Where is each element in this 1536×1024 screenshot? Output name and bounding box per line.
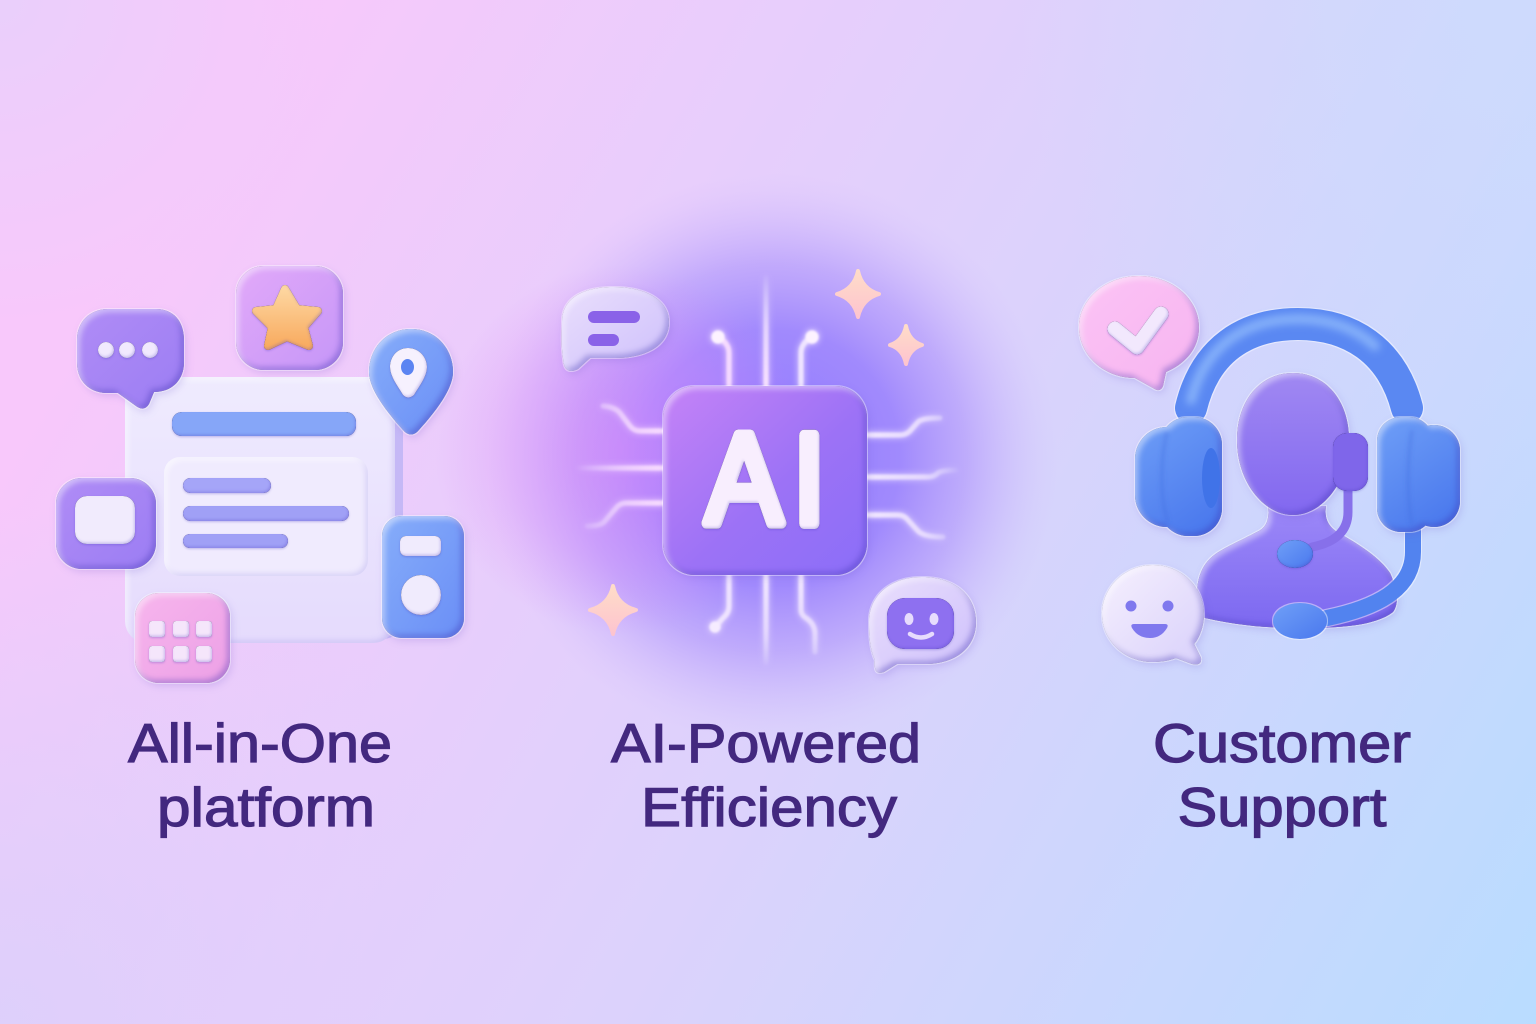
panel: AI-powered efficiency illustration [435,173,1057,743]
heading: customer support [1153,712,1411,838]
icon: chat bubble with dots [77,309,184,409]
panel: all-in-one platform illustration [56,266,464,683]
AI label: AI [706,407,825,551]
heading: customer support: Customer [1153,712,1411,774]
microphone ear piece [1333,433,1368,491]
panel: customer support illustration [1079,276,1460,664]
microphone boom short [1312,488,1348,547]
purple glow behind chip [435,173,1057,743]
app window card [125,377,403,643]
heading: AI-powered efficiency [611,712,921,838]
icon: square tile [56,478,156,569]
heading: all-in-one platform: All-in-One [128,712,392,774]
left ear cushion [1135,417,1222,536]
check mark bubble [1079,276,1199,390]
microphone tip [1277,540,1313,568]
icon: star tile [236,266,343,370]
icon: blue device tile [382,516,464,638]
AI chip [663,386,867,575]
agent head [1237,373,1349,515]
window header bar [172,412,356,436]
headset lower microphone [1273,603,1327,639]
chat bubble with robot face [869,577,976,673]
sparkle large [837,271,879,317]
chat bubble with lines [562,287,669,371]
sparkle small [890,326,922,364]
inner content card [164,457,368,576]
smiley bubble [1102,565,1204,664]
headset cable [1327,530,1413,618]
headset headband [1191,319,1407,408]
right ear cushion [1377,417,1460,532]
heading: customer support: Support [1178,776,1386,838]
heading: AI-powered efficiency: Efficiency [641,776,898,838]
heading: all-in-one platform: platform [157,776,375,838]
agent body [1197,506,1397,628]
sparkle lower left [590,586,636,634]
heading: AI-powered efficiency: AI-Powered [611,712,921,774]
icon: location pin [369,329,453,434]
circuit traces [577,277,960,663]
icon: pink grid tile [135,593,230,683]
heading: all-in-one platform [128,712,392,838]
